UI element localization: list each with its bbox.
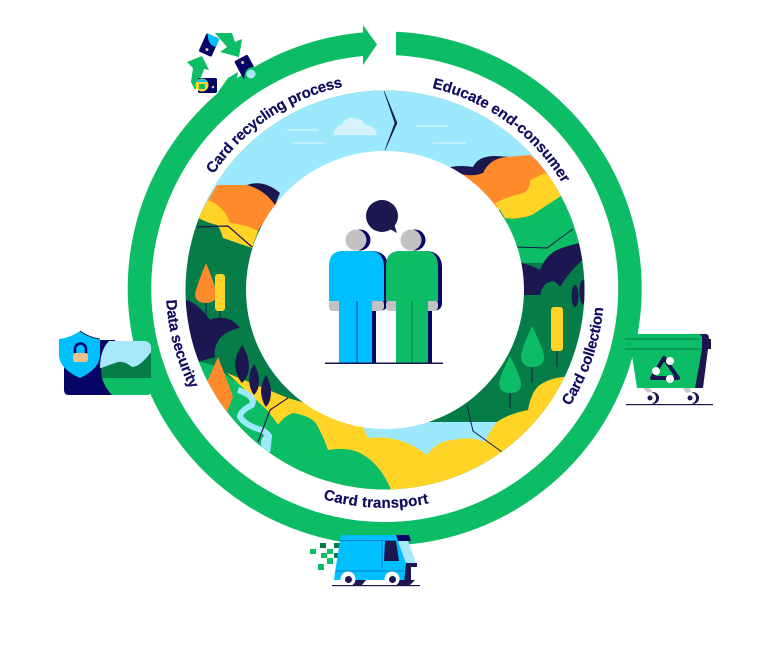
van details: [336, 540, 404, 571]
sky streaks: [287, 126, 466, 143]
left yellow hill: [198, 200, 258, 248]
van cab top: [396, 535, 411, 541]
bottom yellow band: [227, 373, 565, 490]
label: educate end-consumer: Educate end-consumer: [432, 78, 570, 182]
icon: recycling cards: [187, 33, 257, 94]
bin lid: [625, 334, 702, 349]
speed pixels: [310, 543, 340, 570]
inner white circle: [246, 151, 524, 429]
central people icon: [325, 200, 443, 364]
speech bubble: [366, 200, 398, 233]
recycling arrows: [187, 33, 242, 94]
card top: [199, 33, 219, 57]
person one: [329, 230, 388, 363]
padlock: [73, 344, 88, 362]
card picture: [100, 341, 151, 368]
card right: [234, 54, 257, 79]
water: [363, 422, 500, 456]
sky: [202, 90, 568, 210]
left navy hill top: [247, 183, 280, 205]
recycling symbol: [652, 357, 678, 383]
bin back: [692, 334, 711, 388]
left crack: [197, 226, 252, 247]
river: [237, 387, 272, 436]
label: card collection: Card collection: [562, 308, 604, 404]
lower right crack: [467, 405, 502, 452]
cloud: [333, 118, 377, 135]
top right navy hill: [450, 156, 510, 176]
van shadow: [350, 580, 415, 585]
icon: recycling bin: [625, 334, 713, 405]
card green band: [102, 378, 151, 395]
green circular arrow: [128, 25, 642, 546]
top right light green hillside: [502, 190, 583, 263]
van wheels: [340, 572, 400, 586]
lid lines: [625, 339, 702, 349]
icon: secure card with shield: [59, 331, 151, 395]
van bumper: [404, 563, 417, 582]
van window: [384, 541, 399, 561]
bottom green hill: [270, 413, 391, 490]
card bottom: [196, 78, 217, 93]
bin body: [631, 349, 702, 388]
card body: [64, 340, 115, 395]
label: card recycling process: Card recycling process: [207, 80, 342, 172]
left orange hill: [208, 185, 278, 232]
right trees: [499, 307, 563, 408]
wheels: [643, 388, 699, 404]
left trees: [195, 263, 225, 320]
label: card transport: Card transport: [324, 490, 429, 510]
circular card recycling infographic: [59, 25, 713, 586]
right leaves: [572, 280, 584, 307]
shield edge: [80, 331, 100, 339]
river mouth: [261, 434, 272, 452]
van windshield: [398, 541, 416, 563]
top right orange hill: [455, 155, 560, 208]
top crack: [384, 91, 397, 150]
top right yellow hill: [495, 173, 561, 219]
left light green ground: [199, 362, 300, 470]
lower left orange tree: [208, 357, 233, 412]
bin ground line: [626, 404, 713, 405]
label: data security: Data security: [166, 300, 198, 386]
van ground line: [332, 585, 420, 586]
left navy hill: [186, 300, 240, 362]
lower left leaves: [235, 345, 271, 407]
landscape ring: [186, 90, 584, 490]
card landscape: [101, 352, 151, 378]
shield: [59, 331, 100, 378]
right navy hill: [521, 243, 582, 295]
right crack: [515, 229, 573, 248]
person two: [386, 230, 442, 363]
ground line: [325, 362, 443, 364]
lower left crack: [258, 398, 288, 442]
icon: delivery van: [310, 535, 420, 586]
van body: [334, 535, 410, 580]
